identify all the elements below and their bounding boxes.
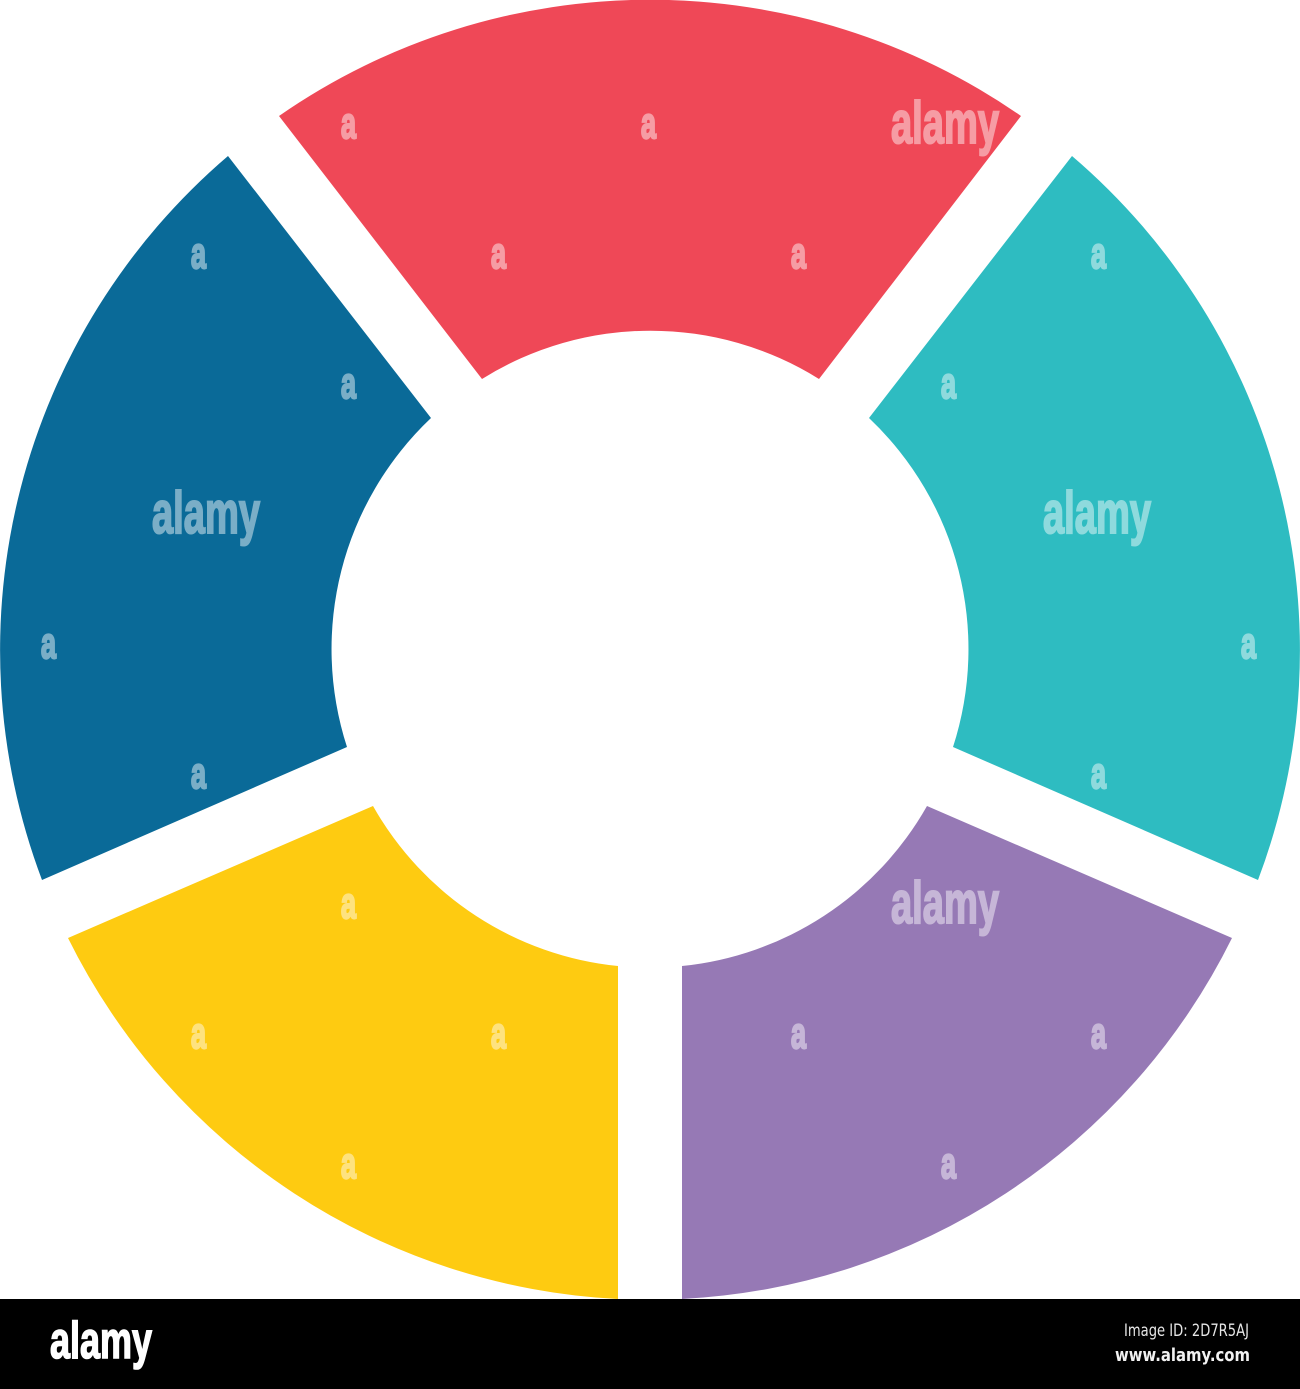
watermark text over donut: alamy <box>891 870 999 936</box>
watermark text over donut: a <box>791 229 806 278</box>
image id: Image ID: 2D7R5AJ <box>1124 1321 1249 1341</box>
watermark text over donut: a <box>1091 1009 1106 1058</box>
footer logo: alamy <box>50 1312 152 1370</box>
watermark text over donut: a <box>341 99 356 148</box>
watermark text over donut: a <box>1091 749 1106 798</box>
segment: blue left <box>0 156 431 880</box>
segment: yellow bottom left <box>68 806 618 1299</box>
watermark text over donut: a <box>941 1139 956 1188</box>
watermark text over donut: alamy <box>1043 480 1151 546</box>
watermark text over donut: a <box>191 749 206 798</box>
segment: purple bottom right <box>682 806 1232 1299</box>
watermark text over donut <box>41 90 1256 1188</box>
watermark text over donut: a <box>941 359 956 408</box>
watermark text over donut: a <box>641 99 656 148</box>
watermark text over donut: a <box>1091 229 1106 278</box>
footer bar <box>0 1299 1300 1389</box>
segment: teal right <box>869 156 1300 880</box>
watermark text over donut: a <box>491 1009 506 1058</box>
watermark text over donut: a <box>791 1009 806 1058</box>
watermark text over donut: a <box>41 619 56 668</box>
watermark text over donut: alamy <box>152 480 260 546</box>
watermark text over donut: a <box>191 229 206 278</box>
watermark text over donut: alamy <box>891 90 999 156</box>
segment: red top <box>279 0 1021 379</box>
watermark text over donut: a <box>341 359 356 408</box>
website url: www.alamy.com <box>1115 1345 1250 1366</box>
watermark text over donut: a <box>1241 619 1256 668</box>
watermark text over donut: a <box>191 1009 206 1058</box>
watermark text over donut: a <box>341 879 356 928</box>
watermark text over donut: a <box>491 229 506 278</box>
watermark text over donut: a <box>341 1139 356 1188</box>
